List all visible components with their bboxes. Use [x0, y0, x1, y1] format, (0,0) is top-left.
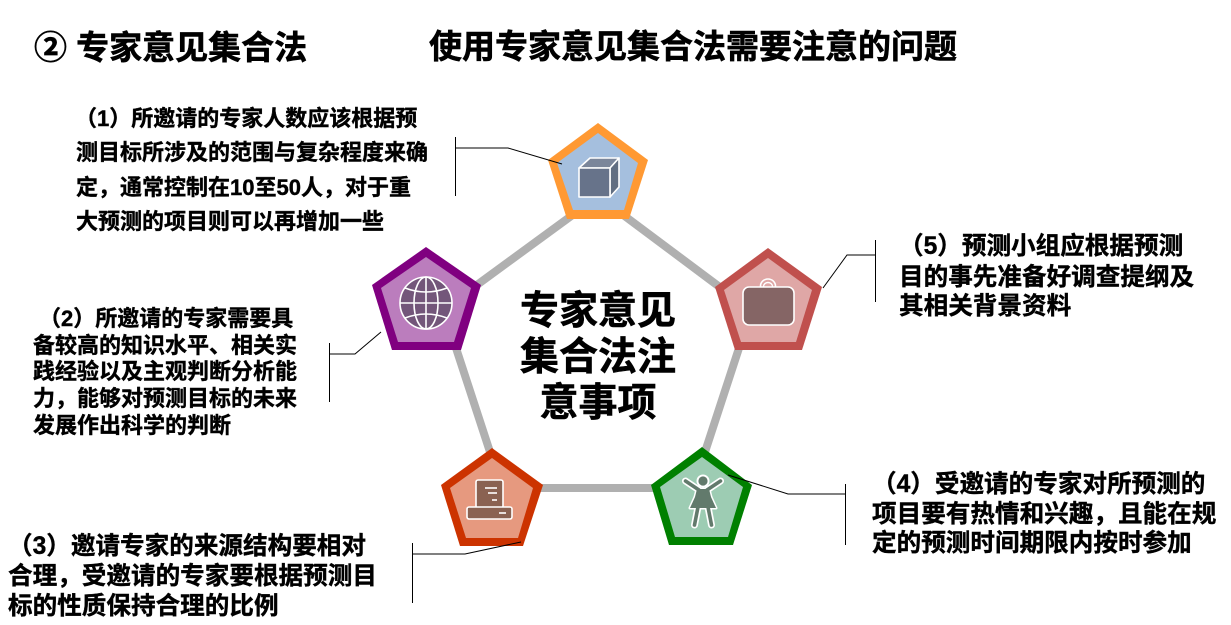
- leader line: item 3: [412, 542, 521, 603]
- node 4: green pentagon with person icon: [651, 447, 752, 545]
- text block: item 2: （2）所邀请的专家需要具: [39, 306, 293, 331]
- leader line: item 1: [456, 137, 562, 196]
- node 1: orange pentagon with cube icon: [548, 123, 648, 219]
- text block: item 2: 备较高的知识水平、相关实: [33, 333, 297, 358]
- node 5: red pentagon with briefcase icon: [715, 248, 822, 350]
- icon: cube: [579, 158, 619, 197]
- text block: item 4: 项目要有热情和兴趣，且能在规: [872, 501, 1216, 528]
- text block: item 2: 力，能够对预测目标的未来: [33, 386, 297, 411]
- leader line: item 2: [330, 332, 381, 402]
- text block: item 4: [872, 470, 1216, 557]
- heading: notes on using the method: 使用专家意见集合法需要注意的问题: [429, 28, 957, 65]
- text block: item 1: 测目标所涉及的范围与复杂程度来确: [76, 140, 428, 165]
- node 2: purple pentagon with globe icon: [372, 247, 481, 350]
- ring connectors: [455, 211, 740, 488]
- text block: item 5: （5）预测小组应根据预测: [899, 233, 1183, 260]
- icon: computer: [467, 480, 512, 519]
- center label: 意事项: [539, 382, 656, 425]
- text block: item 2: [33, 306, 297, 438]
- text block: item 2: 发展作出科学的判断: [33, 413, 231, 438]
- text block: item 1: （1）所邀请的专家人数应该根据预: [75, 106, 417, 131]
- center label: [520, 290, 676, 425]
- text block: item 1: 大预测的项目则可以再增加一些: [76, 209, 384, 234]
- text block: item 3: 标的性质保持合理的比例: [8, 593, 279, 620]
- center label: 专家意见: [520, 290, 676, 333]
- icon: briefcase: [743, 279, 794, 325]
- text block: item 3: （3）邀请专家的来源结构要相对: [8, 533, 366, 560]
- text block: item 1: [75, 106, 428, 234]
- text block: item 1: 定，通常控制在10至50人，对于重: [76, 175, 411, 200]
- text block: item 2: 践经验以及主观判断分析能: [33, 359, 297, 384]
- text block: item 4: （4）受邀请的专家对所预测的: [872, 471, 1205, 498]
- leader line: item 5: [823, 240, 876, 302]
- text block: item 3: [8, 532, 377, 620]
- text block: item 5: 其相关背景资料: [899, 293, 1071, 320]
- center label: 集合法注: [520, 336, 676, 379]
- text block: item 5: 目的事先准备好调查提纲及: [899, 264, 1194, 291]
- title: method name: ② 专家意见集合法: [34, 29, 307, 66]
- text block: item 5: [899, 232, 1194, 320]
- text block: item 4: 定的预测时间期限内按时参加: [872, 530, 1192, 557]
- leader line: item 4: [728, 475, 846, 545]
- icon: person with raised arms: [686, 474, 720, 525]
- icon: globe: [400, 277, 452, 329]
- text block: item 3: 合理，受邀请的专家要根据预测目: [8, 563, 377, 590]
- node 3: orange-red pentagon with computer icon: [441, 448, 543, 546]
